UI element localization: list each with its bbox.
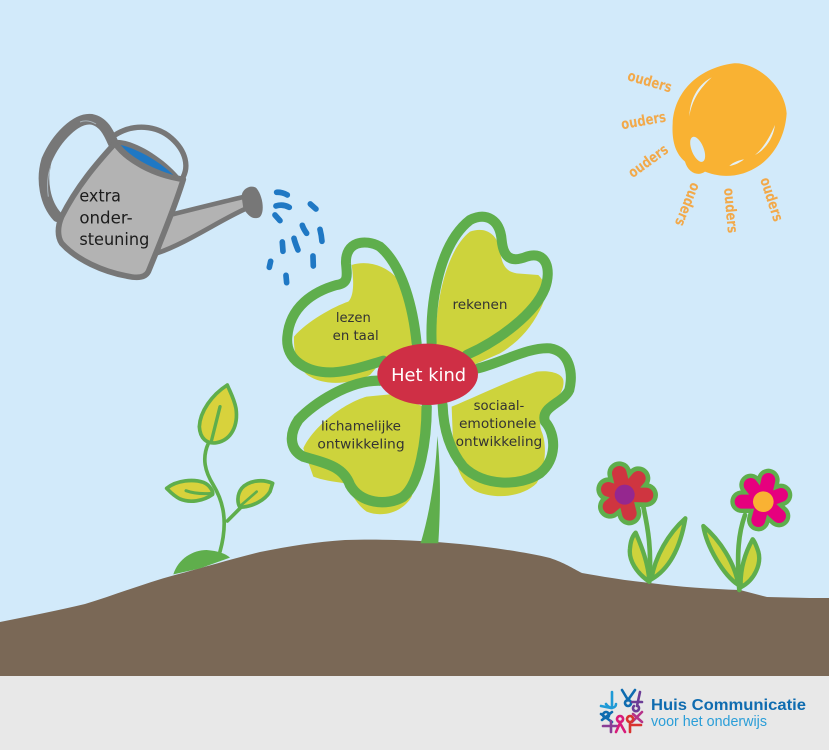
leaf: rekenen: rekenen — [452, 298, 507, 313]
can spout — [157, 197, 247, 253]
sun rays: ouders: ouders — [720, 187, 741, 234]
left flower — [608, 473, 685, 582]
logo mark — [601, 690, 642, 732]
sun rays: ouders — [620, 68, 786, 234]
can body — [58, 143, 183, 277]
logo: Huis Communicatie — [601, 690, 806, 732]
petals — [742, 480, 781, 520]
leaf: sociaal-emotionele ontwikkeling — [443, 348, 571, 496]
sun — [620, 63, 787, 234]
leaf: sociaal-emotionele ontwikkeling: ontwikkeling — [456, 435, 542, 450]
petals outline — [742, 480, 781, 520]
sun rays: ouders: ouders — [756, 175, 786, 224]
water drops — [269, 192, 322, 283]
can label — [79, 187, 149, 249]
leaf: lezen en taal: lezen — [336, 311, 371, 326]
leaf: lichamelijke ontwikkeling: ontwikkeling — [317, 438, 405, 453]
can label: extra — [79, 187, 121, 206]
clover — [287, 217, 571, 543]
can label: onder- — [79, 208, 133, 227]
can label: steuning — [79, 230, 149, 249]
top leaf — [199, 385, 236, 443]
clover stem — [421, 436, 440, 543]
can handle — [44, 119, 113, 217]
sun rays: ouders: ouders — [625, 141, 672, 182]
leaf: rekenen — [431, 217, 548, 365]
leaf: lezen en taal: en taal — [333, 329, 379, 344]
water in can — [115, 140, 182, 179]
sun rays: ouders: ouders — [620, 109, 668, 133]
watering can — [44, 119, 263, 277]
logo name: Huis Communicatie — [651, 697, 806, 714]
leaf: lezen en taal — [287, 242, 417, 383]
leaf: lichamelijke ontwikkeling — [292, 381, 427, 514]
right leaf — [238, 481, 273, 507]
sun disc — [672, 63, 787, 176]
petals outline — [608, 473, 646, 513]
sun rays: ouders: ouders — [626, 68, 674, 96]
seedling mound — [173, 550, 230, 574]
left leaf — [167, 481, 213, 501]
footer band — [0, 675, 829, 750]
center: Het kind — [377, 344, 478, 405]
sun rays: ouders: ouders — [671, 180, 704, 229]
seedling stem — [205, 443, 240, 552]
leaf: lichamelijke ontwikkeling: lichamelijke — [321, 420, 401, 435]
flowers — [608, 473, 781, 590]
can top arc — [115, 127, 186, 177]
center: Het kind: Het kind — [391, 365, 466, 386]
logo tagline: voor het onderwijs — [651, 714, 767, 730]
ground — [0, 540, 829, 676]
spout head — [242, 187, 263, 218]
leaf: sociaal-emotionele ontwikkeling: emotionele — [459, 417, 536, 432]
right flower — [703, 480, 781, 590]
petals — [608, 473, 646, 513]
leaf: sociaal-emotionele ontwikkeling: sociaal- — [474, 399, 524, 414]
seedling — [167, 385, 273, 574]
